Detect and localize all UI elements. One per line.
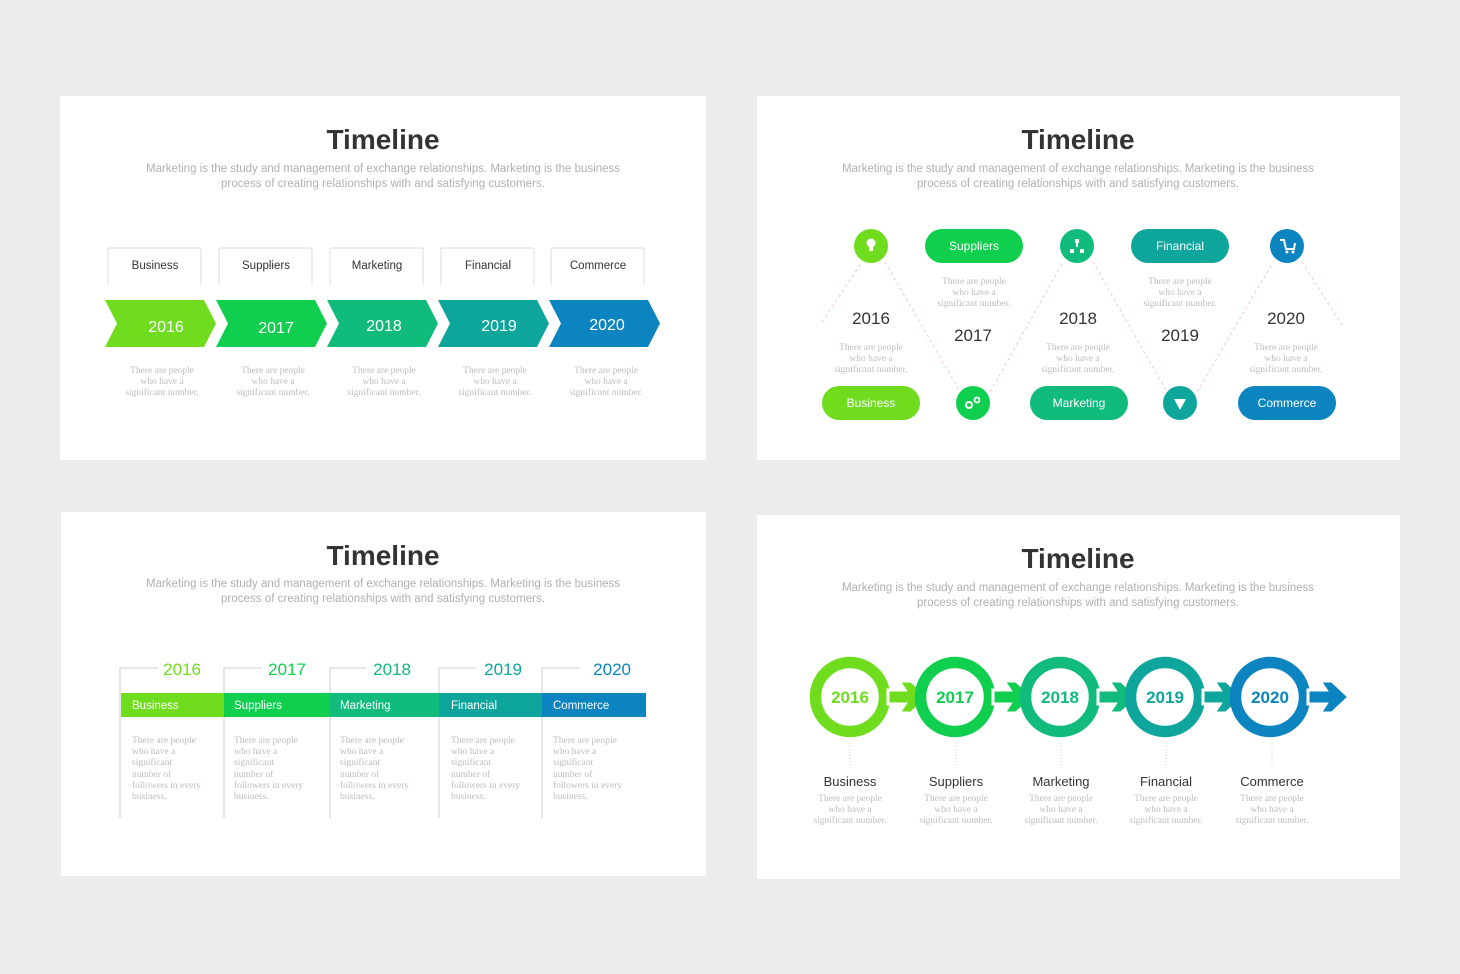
descriptions: There are people [1240, 794, 1304, 804]
heading: Timeline [1021, 124, 1135, 155]
chevrons: 2016 [148, 319, 184, 336]
bars: Suppliers [234, 700, 282, 712]
chevrons [105, 300, 660, 347]
chevrons: 2017 [258, 320, 294, 337]
descriptions: significant [553, 757, 593, 768]
years [163, 660, 631, 679]
descriptions: who have a [828, 805, 872, 815]
bars: Commerce [553, 700, 609, 712]
years: 2018 [373, 660, 411, 679]
descriptions: There are people [130, 366, 194, 376]
years: 2017 [954, 326, 992, 345]
labels: Financial [1140, 774, 1192, 789]
descriptions: followers in every [451, 780, 520, 791]
labels [824, 774, 1304, 789]
pills [822, 229, 1336, 420]
labels: Commerce [1240, 774, 1304, 789]
descriptions [125, 366, 643, 398]
bars: Financial [451, 700, 497, 712]
years: 2020 [1267, 309, 1305, 328]
arrows and rings: 2017 [936, 688, 974, 707]
descriptions: number of [340, 769, 380, 780]
descriptions: significant number. [1143, 298, 1217, 309]
descriptions: followers in every [340, 780, 409, 791]
subtitle: process of creating relationships with and satisfying customers. [917, 178, 1239, 190]
subtitle: process of creating relationships with and satisfying customers. [221, 178, 545, 190]
panel: chevron timeline: Suppliers [242, 260, 290, 272]
descriptions: significant number. [347, 387, 421, 398]
panel: chevron timeline [60, 96, 706, 460]
descriptions: significant number. [834, 364, 908, 375]
descriptions: There are people [1134, 794, 1198, 804]
bars [121, 693, 646, 717]
descriptions: who have a [1039, 805, 1083, 815]
labels: Marketing [1032, 774, 1090, 789]
descriptions: There are people [1029, 794, 1093, 804]
descriptions: business. [340, 792, 375, 802]
descriptions [132, 736, 622, 802]
subtitle: process of creating relationships with and satisfying customers. [917, 597, 1239, 609]
years: 2019 [484, 660, 522, 679]
heading: Timeline [1021, 543, 1135, 574]
subtitle: Marketing is the study and management of exchange relationships. Marketing is the business [146, 578, 620, 590]
pills: Suppliers [949, 239, 999, 253]
descriptions: significant [234, 757, 274, 768]
panel: zigzag timeline [757, 96, 1400, 460]
chevrons: 2020 [589, 317, 625, 334]
descriptions: significant number. [125, 387, 199, 398]
subtitle: Marketing is the study and management of exchange relationships. Marketing is the business [842, 163, 1314, 175]
subtitle: process of creating relationships with and satisfying customers. [221, 593, 545, 605]
descriptions: There are people [352, 366, 416, 376]
subtitle [146, 163, 620, 190]
descriptions: There are people [463, 366, 527, 376]
descriptions: who have a [140, 377, 184, 387]
icons circles [854, 229, 1304, 420]
descriptions: significant number. [813, 815, 887, 826]
descriptions [813, 794, 1309, 826]
years [852, 309, 1305, 345]
descriptions: who have a [132, 747, 176, 757]
subtitle [842, 163, 1314, 190]
descriptions: who have a [553, 747, 597, 757]
years: 2017 [268, 660, 306, 679]
descriptions: There are people [241, 366, 305, 376]
descriptions: who have a [251, 377, 295, 387]
descriptions: number of [553, 769, 593, 780]
descriptions: There are people [1148, 277, 1212, 287]
subtitle: Marketing is the study and management of exchange relationships. Marketing is the business [146, 163, 620, 175]
subtitle [842, 582, 1314, 609]
descriptions: who have a [234, 747, 278, 757]
years: 2019 [1161, 326, 1199, 345]
descriptions: There are people [942, 277, 1006, 287]
descriptions: There are people [1046, 343, 1110, 353]
pills: Business [847, 396, 895, 410]
descriptions: business. [234, 792, 269, 802]
descriptions: significant number. [1235, 815, 1309, 826]
bars: Business [132, 700, 179, 712]
descriptions: number of [234, 769, 274, 780]
descriptions: followers in every [234, 780, 303, 791]
connector lines [120, 668, 580, 818]
descriptions: who have a [473, 377, 517, 387]
descriptions: significant number. [236, 387, 310, 398]
years: 2020 [593, 660, 631, 679]
descriptions: There are people [132, 736, 196, 746]
panel: chevron timeline: Financial [465, 260, 511, 272]
years: 2016 [163, 660, 201, 679]
heading: Timeline [326, 540, 440, 571]
chevrons: 2019 [481, 318, 517, 335]
descriptions: who have a [451, 747, 495, 757]
descriptions: significant number. [1024, 815, 1098, 826]
descriptions: who have a [340, 747, 384, 757]
descriptions: business. [451, 792, 486, 802]
descriptions: significant [451, 757, 491, 768]
dotted connectors [850, 743, 1272, 767]
descriptions: There are people [451, 736, 515, 746]
tabs [108, 248, 644, 285]
years: 2018 [1059, 309, 1097, 328]
pills: Financial [1156, 239, 1204, 253]
descriptions: who have a [1144, 805, 1188, 815]
descriptions: significant number. [1249, 364, 1323, 375]
panel: chevron timeline: Commerce [570, 260, 626, 272]
descriptions: significant number. [1129, 815, 1203, 826]
descriptions: significant number. [937, 298, 1011, 309]
descriptions: who have a [934, 805, 978, 815]
arrows and rings: 2018 [1041, 688, 1079, 707]
arrows and rings: 2019 [1146, 688, 1184, 707]
descriptions: There are people [839, 343, 903, 353]
descriptions: There are people [818, 794, 882, 804]
descriptions: significant number. [458, 387, 532, 398]
pills: Commerce [1258, 396, 1317, 410]
descriptions: significant number. [1041, 364, 1115, 375]
arrows and rings: 2020 [1251, 688, 1289, 707]
subtitle: Marketing is the study and management of exchange relationships. Marketing is the business [842, 582, 1314, 594]
descriptions [834, 277, 1323, 375]
descriptions: who have a [1250, 805, 1294, 815]
descriptions: business. [553, 792, 588, 802]
descriptions: significant number. [569, 387, 643, 398]
panel: bar timeline [61, 512, 706, 876]
descriptions: who have a [584, 377, 628, 387]
heading: Timeline [326, 124, 440, 155]
descriptions: who have a [849, 354, 893, 364]
descriptions: who have a [952, 288, 996, 298]
descriptions: who have a [1264, 354, 1308, 364]
descriptions: followers in every [553, 780, 622, 791]
descriptions: number of [132, 769, 172, 780]
labels: Suppliers [929, 774, 984, 789]
descriptions: number of [451, 769, 491, 780]
years: 2016 [852, 309, 890, 328]
descriptions: There are people [574, 366, 638, 376]
panel: chevron timeline: Business [132, 260, 179, 272]
descriptions: business. [132, 792, 167, 802]
descriptions: There are people [1254, 343, 1318, 353]
descriptions: There are people [553, 736, 617, 746]
descriptions: There are people [340, 736, 404, 746]
descriptions: significant number. [919, 815, 993, 826]
arrows and rings [816, 662, 1349, 732]
descriptions: who have a [362, 377, 406, 387]
panel: circle timeline [757, 515, 1400, 879]
descriptions: significant [132, 757, 172, 768]
bars: Marketing [340, 700, 390, 712]
subtitle [146, 578, 620, 605]
descriptions: followers in every [132, 780, 201, 791]
descriptions: There are people [924, 794, 988, 804]
pills: Marketing [1053, 396, 1105, 410]
panel: chevron timeline: Marketing [352, 260, 402, 272]
descriptions: who have a [1158, 288, 1202, 298]
dashed zigzag [822, 262, 862, 322]
arrows and rings: 2016 [831, 688, 869, 707]
descriptions: There are people [234, 736, 298, 746]
chevrons: 2018 [366, 318, 402, 335]
descriptions: who have a [1056, 354, 1100, 364]
labels: Business [824, 774, 877, 789]
descriptions: significant [340, 757, 380, 768]
